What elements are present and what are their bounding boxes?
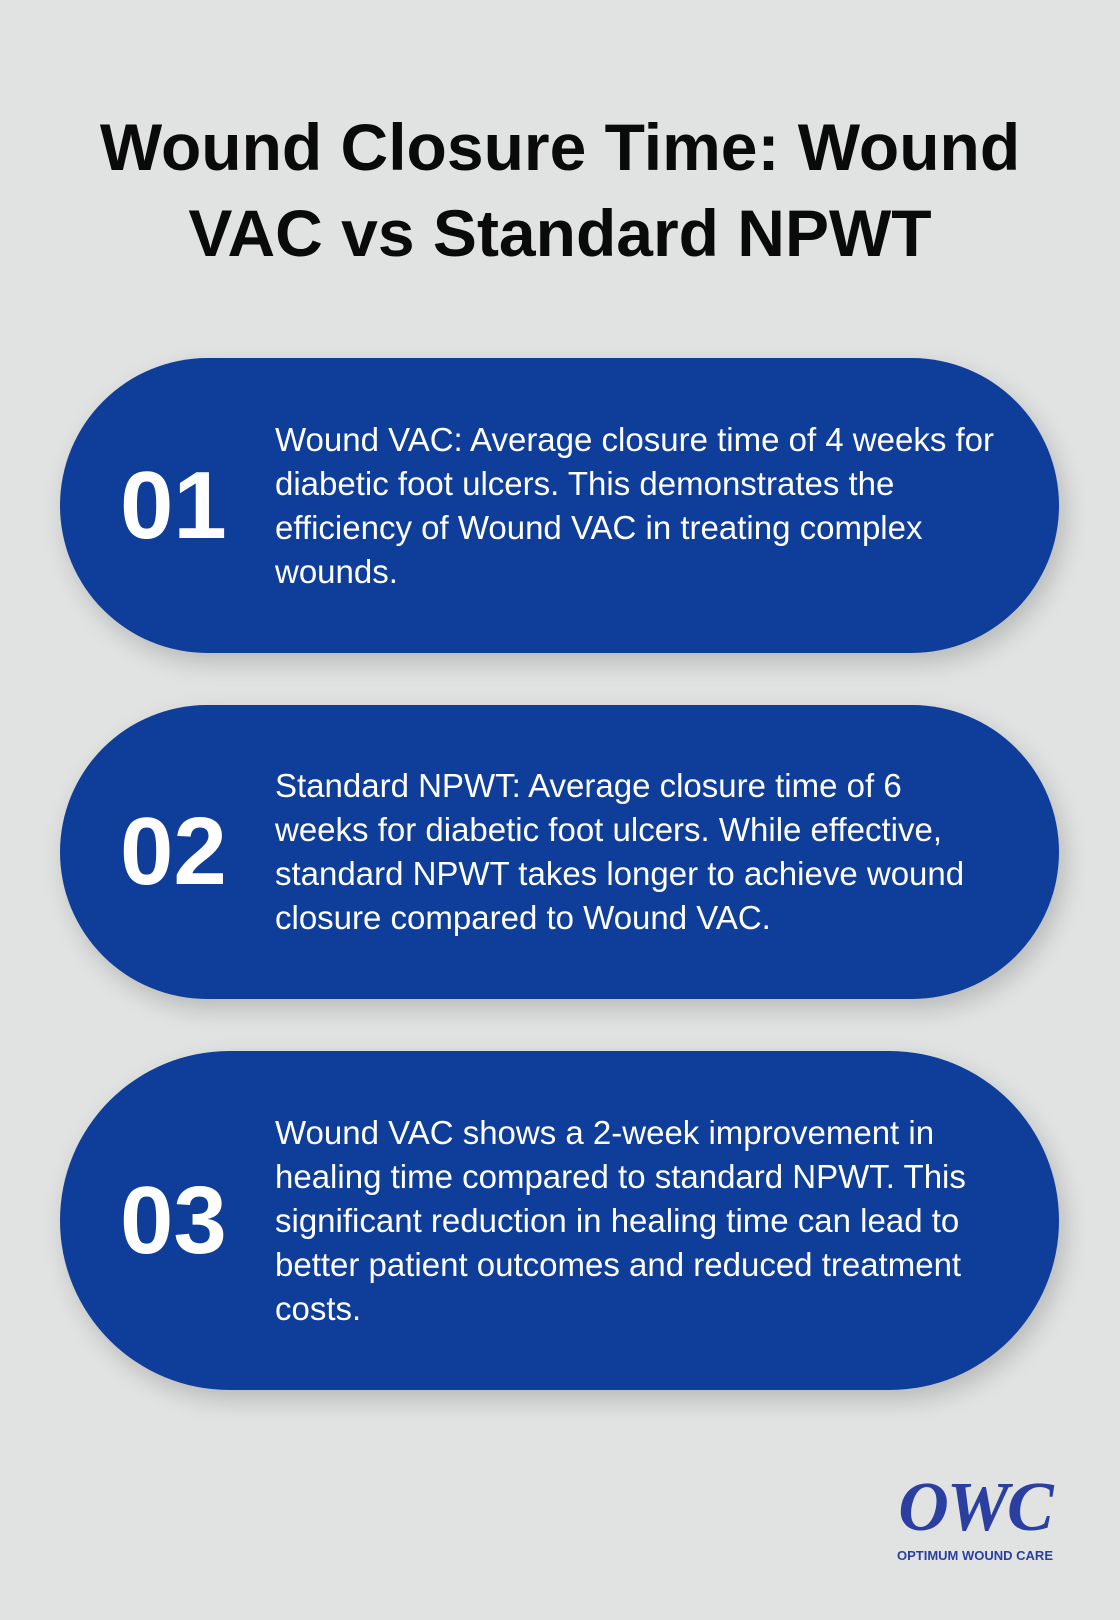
text 02: closure compared to Wound VAC. [275, 899, 771, 936]
title: VAC vs Standard NPWT [188, 196, 932, 270]
text 01: diabetic foot ulcers. This demonstrates the [275, 464, 894, 502]
text 01: Wound VAC: Average closure time of 4 weeks for [275, 420, 994, 458]
text 03: better patient outcomes and reduced treatment [275, 1246, 961, 1282]
panel: 03 [60, 1051, 1059, 1390]
title: Wound Closure Time: Wound [100, 110, 1020, 184]
text 01: efficiency of Wound VAC in treating complex [275, 508, 922, 546]
text 01: wounds. [275, 552, 398, 590]
number 02: 02 [120, 798, 227, 905]
text 01 [275, 420, 994, 590]
logo: OWC [898, 1469, 1052, 1546]
title [100, 110, 1020, 270]
number 03: 03 [120, 1166, 227, 1274]
text 02 [275, 767, 964, 936]
number 01: 01 [120, 452, 227, 558]
text 03 [275, 1114, 966, 1326]
text 02: weeks for diabetic foot ulcers. While effective, [275, 811, 942, 848]
text 03: Wound VAC shows a 2-week improvement in [275, 1114, 934, 1150]
panel: 02 [60, 705, 1059, 999]
text 02: standard NPWT takes longer to achieve wound [275, 855, 964, 892]
text 03: healing time compared to standard NPWT. This [275, 1158, 966, 1194]
text 03: costs. [275, 1290, 361, 1326]
text 03: significant reduction in healing time can lead to [275, 1202, 959, 1238]
panel: 01 [60, 358, 1059, 653]
text 02: Standard NPWT: Average closure time of 6 [275, 767, 902, 804]
logo: OPTIMUM WOUND CARE [897, 1548, 1053, 1563]
